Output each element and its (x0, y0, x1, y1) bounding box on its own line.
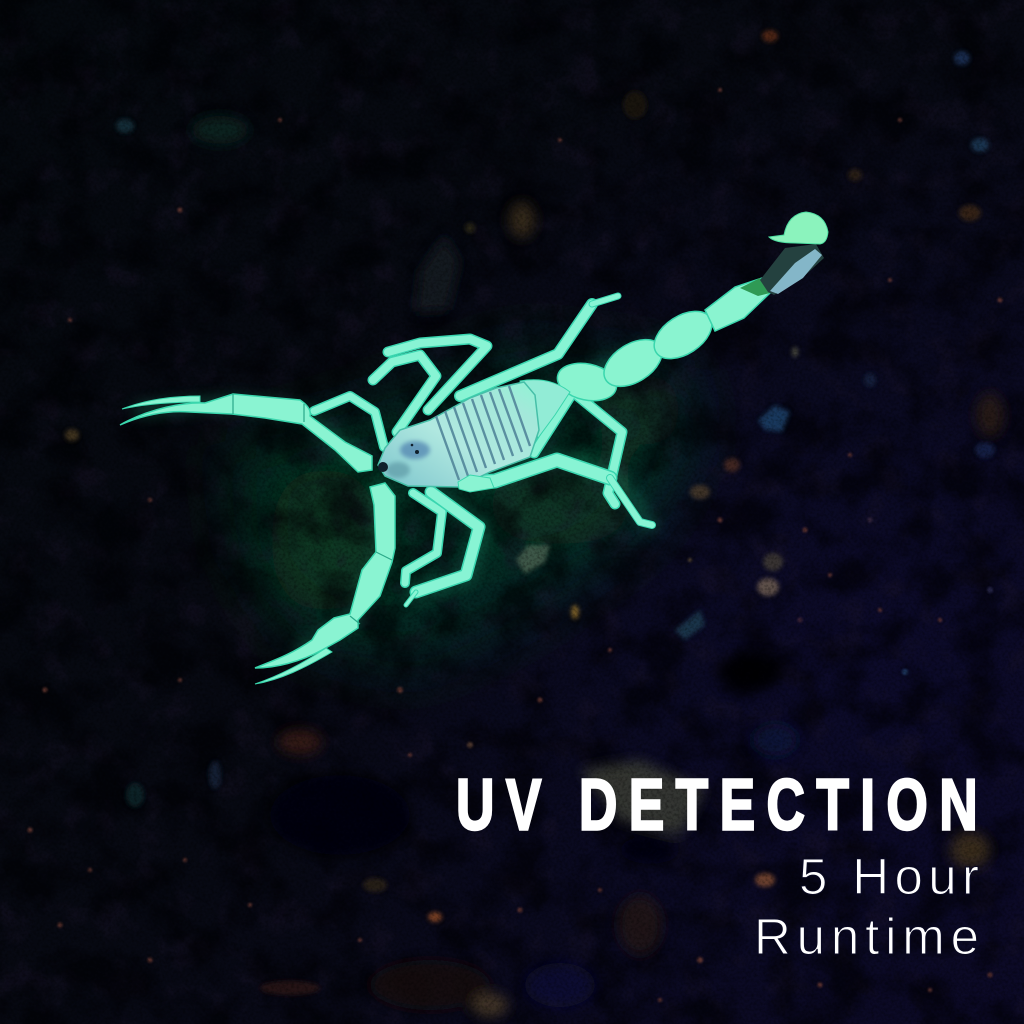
leg: upper right extended (460, 296, 618, 396)
tail segment 4 shadow (740, 278, 770, 296)
stinger vesicle highlight (770, 249, 822, 294)
tail segment 4 (705, 278, 770, 331)
abdomen plate lines (436, 386, 530, 480)
title: UV DETECTION: UV DETECTION (456, 766, 978, 845)
tail segment 2 (596, 330, 670, 396)
leg: upper left middle (373, 355, 436, 432)
leg: lower inner (405, 493, 442, 583)
coxa joint (458, 475, 494, 492)
tail segment 3 (646, 302, 720, 368)
leg: lower outer (406, 492, 479, 605)
pincer: upper left claw (120, 394, 372, 472)
stinger vesicle (760, 244, 824, 295)
scorpion (120, 212, 828, 684)
tail segment 1 (554, 358, 620, 406)
heading text block (456, 766, 979, 965)
subtitle line: 5 Hour: 5 Hour (799, 848, 979, 905)
eyes (378, 444, 419, 472)
leg: right lower (465, 460, 652, 525)
scorpion glow halo (140, 335, 680, 652)
pincer: lower claw (255, 483, 395, 684)
leg: right folded (534, 392, 622, 504)
leg: upper left front (388, 339, 487, 410)
subtitle line: Runtime: Runtime (754, 908, 979, 965)
head marks (386, 441, 430, 478)
stinger bulb (769, 212, 828, 244)
leg: upper left rear (314, 396, 384, 447)
tail segments (554, 212, 828, 406)
green UV glow on the ground (225, 345, 690, 670)
body: carapace and abdomen (378, 382, 539, 487)
body: tail base (520, 380, 570, 438)
